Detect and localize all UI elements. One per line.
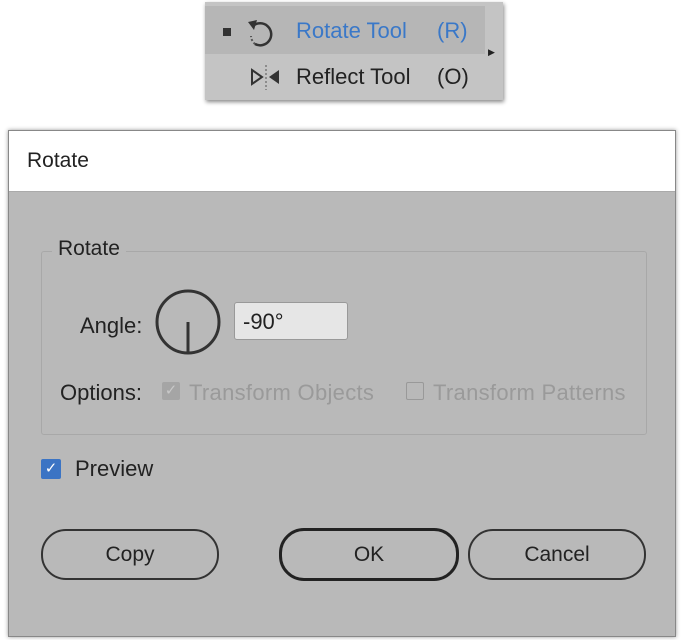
- rotate dialog: [8, 130, 676, 637]
- button: copy: Copy: [105, 543, 155, 566]
- menu item: reflect tool: [251, 64, 469, 90]
- menu item: reflect tool: Reflect Tool: [296, 64, 411, 89]
- options row: [60, 380, 626, 405]
- button: ok: [279, 528, 459, 581]
- options row: Transform Objects: [189, 380, 374, 405]
- rotate dialog: Rotate: [58, 237, 120, 260]
- tool menu flyout: ▶: [488, 47, 495, 57]
- button: copy: [41, 529, 219, 580]
- preview checkbox: Preview: [75, 456, 153, 481]
- preview checkbox: ✓: [45, 460, 57, 477]
- menu item: rotate tool: [205, 6, 485, 54]
- options row: Options:: [60, 380, 142, 405]
- menu item: reflect tool: (O): [437, 64, 469, 89]
- angle input: [234, 302, 348, 340]
- options row: ✓: [165, 382, 177, 399]
- dialog title bar: Rotate: [27, 149, 89, 172]
- button: ok: OK: [354, 543, 384, 566]
- dialog title bar: [9, 131, 675, 192]
- tool menu flyout: [205, 2, 503, 100]
- group box: rotate: [41, 251, 647, 435]
- options row: Transform Patterns: [433, 380, 626, 405]
- angle label: Angle:: [80, 313, 142, 338]
- icon: angle dial: [156, 290, 220, 354]
- button: cancel: [468, 529, 646, 580]
- menu item: rotate tool: (R): [437, 18, 468, 43]
- preview checkbox: [41, 456, 154, 481]
- button: cancel: Cancel: [524, 543, 590, 566]
- angle input: -90°: [243, 309, 284, 334]
- menu item: rotate tool: Rotate Tool: [296, 18, 407, 43]
